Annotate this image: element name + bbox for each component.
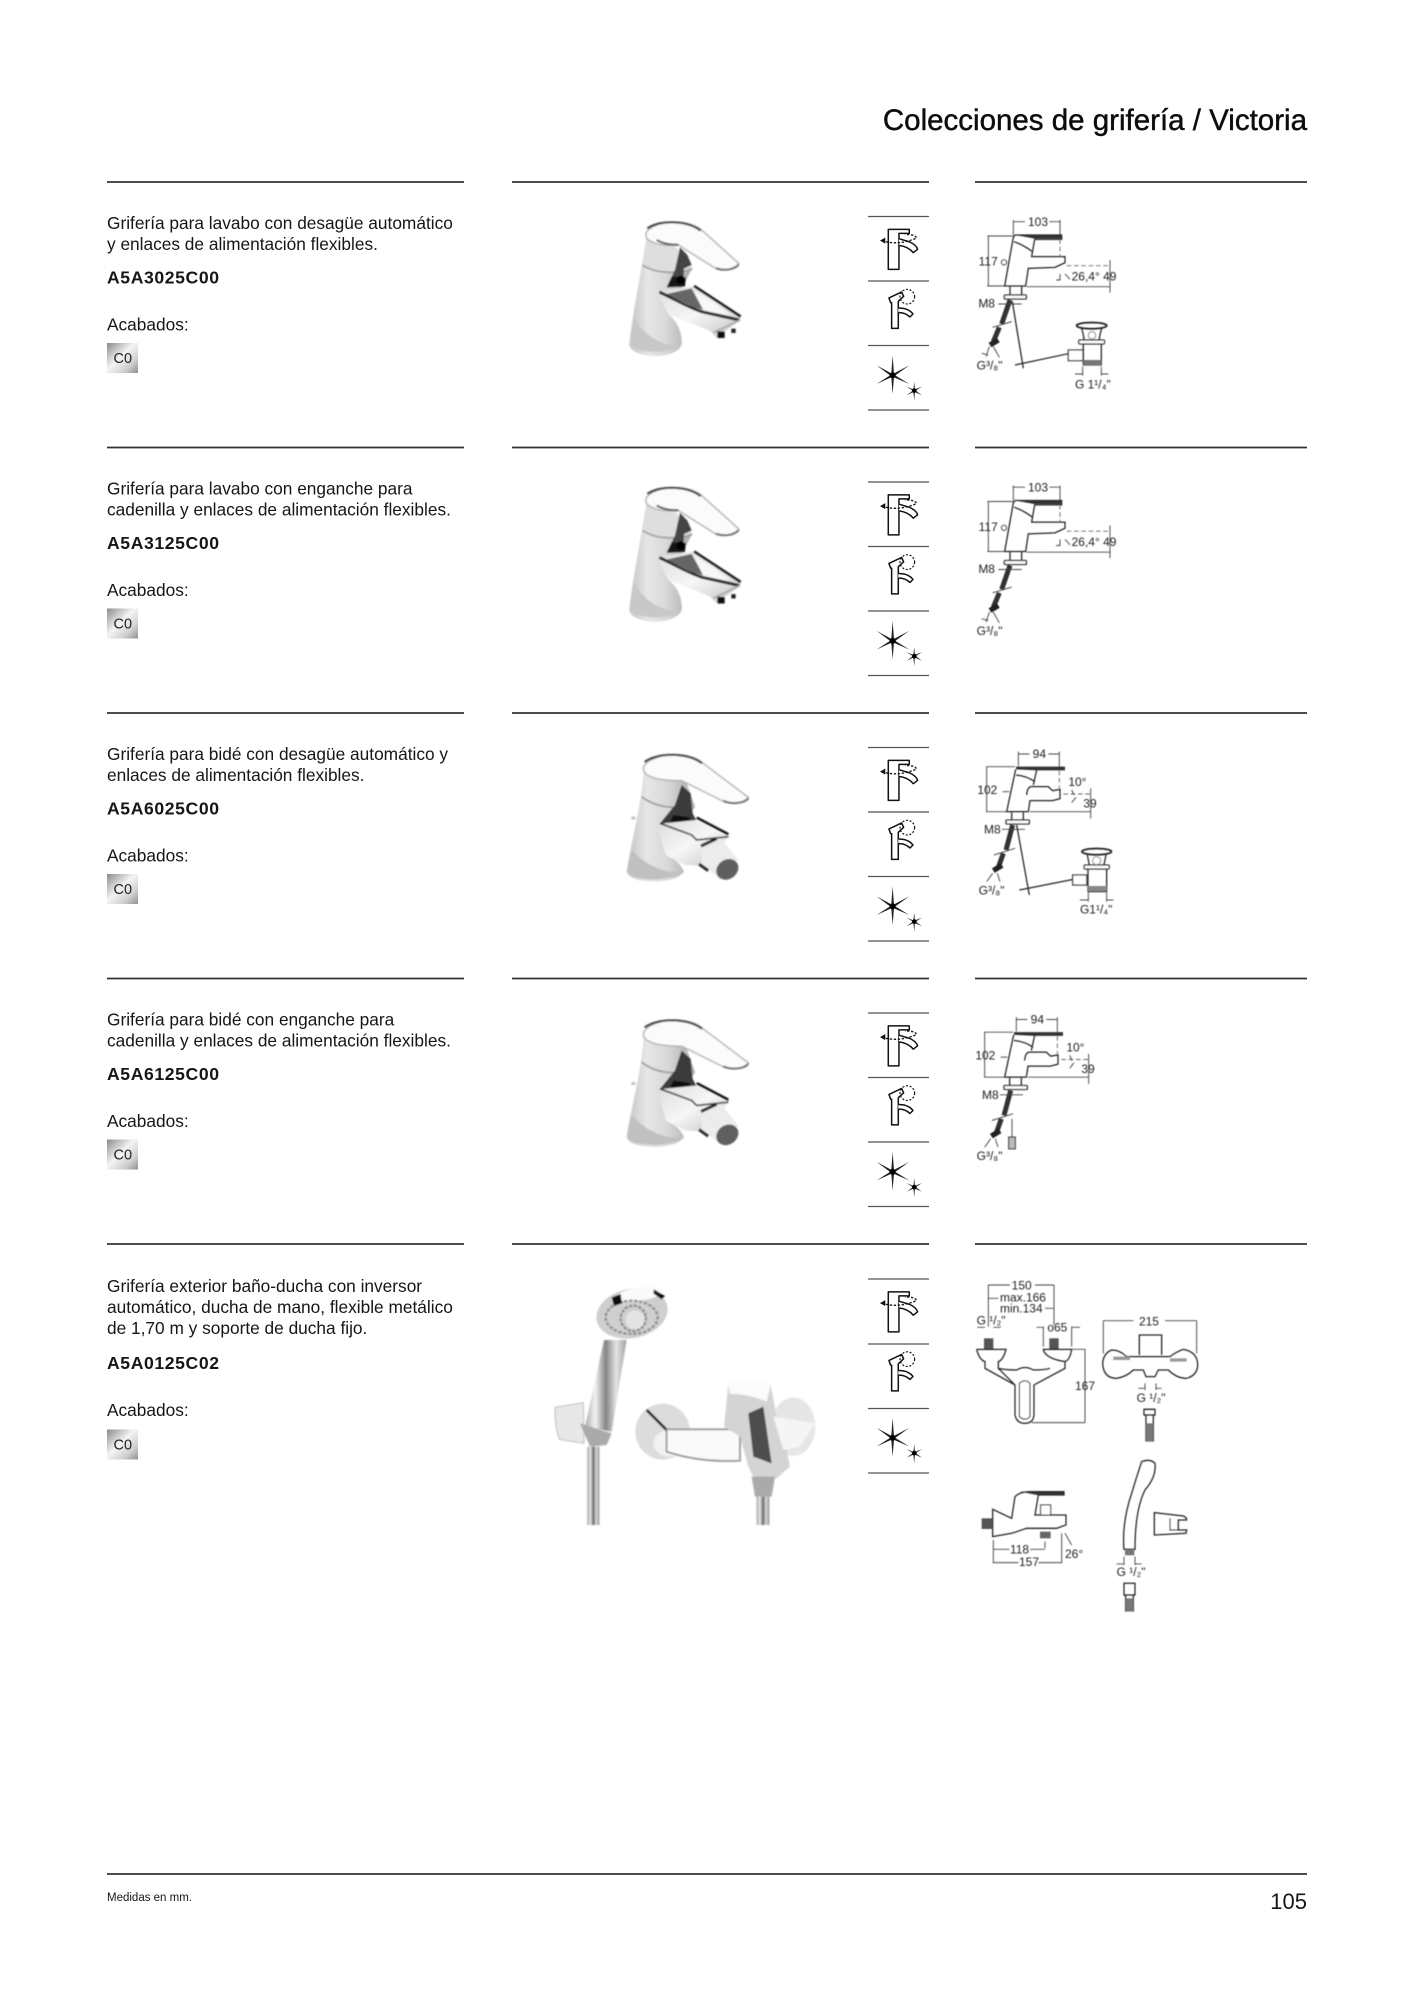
dimension drawing: G ¹/₂" (1137, 1391, 1166, 1405)
dimension drawing: M8 (978, 297, 995, 311)
product row 5 (107, 1244, 1307, 1612)
dimension drawing (975, 1012, 1095, 1163)
dimension drawing: M8 (982, 1088, 999, 1102)
dimension drawing: 103 (1028, 215, 1048, 229)
top view (1103, 1321, 1198, 1442)
dimension drawing: 94 (1033, 747, 1046, 761)
finish swatch: C0 (114, 882, 132, 898)
footnote: Medidas en mm. (107, 1892, 192, 1904)
description: enlaces de alimentación flexibles. (107, 765, 364, 785)
dimension drawing: 10° (1068, 775, 1087, 789)
mixer body (635, 1380, 815, 1525)
product row 1 (107, 182, 1307, 410)
description: Grifería para lavabo con desagüe automático (107, 213, 453, 233)
dimension drawing (977, 480, 1117, 638)
dimension drawing: 167 (1075, 1379, 1095, 1393)
product code: A5A0125C02 (107, 1353, 220, 1373)
description: de 1,70 m y soporte de ducha fijo. (107, 1318, 367, 1338)
dimension drawing: 215 (1139, 1314, 1159, 1328)
dimension drawing: 117 (979, 255, 998, 269)
front view (977, 1285, 1085, 1423)
dimension drawing: max.166 (1000, 1290, 1046, 1304)
feature icons (868, 1279, 929, 1473)
finish swatch (107, 874, 138, 904)
dimension drawing: 94 (1031, 1012, 1044, 1026)
hand shower and bracket (1117, 1460, 1187, 1612)
dimension drawing: 10° (1066, 1040, 1085, 1054)
product code: A5A6125C00 (107, 1064, 220, 1084)
dimension drawing: 26° (1065, 1547, 1083, 1561)
finish swatch (107, 1430, 138, 1460)
dimension drawing: G³/₈" (979, 883, 1005, 897)
dimension drawing: 26,4° 49 (1072, 270, 1117, 284)
dimension drawing: 117 (979, 520, 998, 534)
dimension drawing: 102 (975, 1048, 996, 1062)
finish swatch: C0 (114, 1438, 132, 1454)
description: Grifería exterior baño-ducha con inversor (107, 1276, 422, 1296)
description: cadenilla y enlaces de alimentación flexibles. (107, 500, 451, 520)
dimension drawing: o65 (1047, 1321, 1068, 1335)
photo: basin mixer (629, 488, 741, 622)
dimension drawing: 26,4° 49 (1072, 535, 1117, 549)
finishes label: Acabados: (107, 846, 189, 866)
dimension drawing: 150 (1012, 1278, 1032, 1292)
product row 4 (107, 978, 1307, 1206)
dimension drawing: G³/₈" (977, 624, 1003, 638)
dimension drawing: G ¹/₂" (1117, 1565, 1146, 1579)
description: automático, ducha de mano, flexible metálico (107, 1297, 453, 1317)
product code: A5A3025C00 (107, 268, 220, 288)
side view (982, 1492, 1072, 1563)
feature icons (868, 748, 929, 941)
photo: basin mixer (629, 222, 741, 356)
product row 3 (107, 713, 1307, 941)
dimension drawing: 39 (1083, 796, 1097, 810)
dimension drawing: min.134 (1000, 1302, 1043, 1316)
feature icons (868, 1013, 929, 1206)
dimension drawing: G 1¹/₄" (1075, 377, 1111, 391)
footer rule (107, 1873, 1307, 1875)
dimension drawing: 103 (1028, 480, 1048, 494)
finishes label: Acabados: (107, 1400, 189, 1420)
photo: bidet mixer (627, 755, 748, 884)
finishes label: Acabados: (107, 1111, 189, 1131)
dimension drawing: G ¹/₂" (977, 1314, 1006, 1328)
dimension drawing: 39 (1081, 1062, 1095, 1076)
product code: A5A6025C00 (107, 798, 220, 818)
feature icons (868, 482, 929, 676)
shower hand piece (585, 1282, 672, 1432)
photo: bath-shower mixer (555, 1282, 815, 1525)
dimension drawing: 102 (977, 783, 998, 797)
product code: A5A3125C00 (107, 533, 220, 553)
product row 2 (107, 448, 1307, 676)
description: y enlaces de alimentación flexibles. (107, 234, 378, 254)
description: Grifería para bidé con enganche para (107, 1010, 395, 1030)
finishes label: Acabados: (107, 314, 189, 334)
finish swatch: C0 (114, 616, 132, 632)
page number: 105 (1270, 1889, 1307, 1914)
finish swatch (107, 608, 138, 638)
wall bracket and hose (555, 1403, 612, 1525)
feature icons (868, 216, 929, 410)
dimension drawing: 157 (1019, 1555, 1039, 1569)
dimension drawing (977, 1278, 1198, 1612)
description: Grifería para lavabo con enganche para (107, 478, 413, 498)
description: Grifería para bidé con desagüe automático y (107, 744, 448, 764)
dimension drawing: G³/₈" (977, 1149, 1003, 1163)
dimension drawing (977, 747, 1113, 916)
dimension drawing: M8 (978, 562, 995, 576)
finishes label: Acabados: (107, 580, 189, 600)
dimension drawing (977, 215, 1117, 391)
dimension drawing: G1¹/₄" (1080, 902, 1112, 916)
dimension drawing: 118 (1010, 1542, 1029, 1556)
finish swatch (107, 343, 138, 373)
title: Colecciones de grifería / Victoria (883, 104, 1308, 137)
dimension drawing: G³/₈" (977, 358, 1003, 372)
finish swatch: C0 (114, 351, 132, 367)
photo: bidet mixer (627, 1020, 748, 1149)
finish swatch (107, 1140, 138, 1170)
dimension drawing: M8 (984, 822, 1001, 836)
description: cadenilla y enlaces de alimentación flexibles. (107, 1030, 451, 1050)
finish swatch: C0 (114, 1148, 132, 1164)
